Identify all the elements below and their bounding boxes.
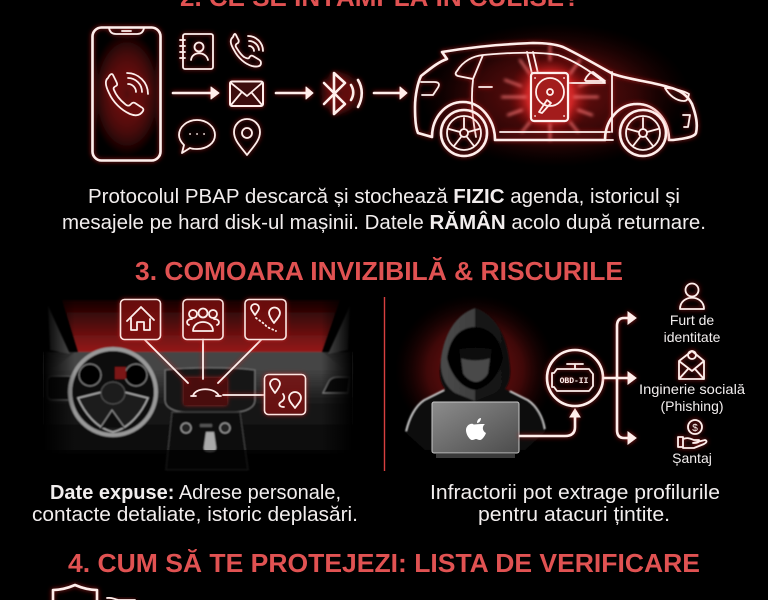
text block: criminals: Infractorii pot extrage profilurile	[430, 482, 720, 504]
dashboard scene	[44, 300, 352, 470]
icon: blackmail hand with coin	[678, 420, 707, 448]
illustration: laptop	[432, 402, 519, 458]
heading: section 3: 3. COMOARA INVIZIBILĂ & RISCURILE	[135, 256, 623, 286]
label: identity theft: identitate	[664, 329, 721, 345]
icon: wireless car	[107, 598, 135, 600]
arrow: data to bluetooth	[276, 87, 313, 99]
laptop logo	[466, 418, 486, 440]
label: blackmail: Șantaj	[672, 450, 712, 466]
icon: hard disk	[531, 73, 568, 121]
arrow: phone to data	[173, 87, 219, 99]
icon: call log	[231, 34, 263, 67]
label: social engineering: Inginerie socială	[639, 381, 745, 397]
connector lines	[145, 339, 264, 395]
text block: PBAP explanation: Protocolul PBAP descarcă și stochează FIZIC agenda, istoricul și	[88, 186, 680, 208]
text block: exposed data: Date expuse: Adrese personale,	[50, 482, 341, 504]
icon: OBD-II engine	[547, 350, 603, 406]
illustration: car with hard disk	[415, 23, 697, 167]
bottom fade	[44, 450, 352, 472]
diagram: phone to car data flow	[91, 23, 697, 167]
icon: OBD-II engine: OBD-II	[560, 377, 589, 386]
icon: person	[680, 284, 704, 309]
panel: hacker attack paths	[395, 284, 745, 466]
car outline	[415, 43, 697, 140]
label: identity theft: Furt de	[670, 312, 714, 328]
icon: envelope	[230, 82, 263, 106]
screen with phone icon	[184, 378, 227, 405]
icon box: saved locations	[264, 374, 306, 414]
text block: PBAP explanation	[62, 186, 706, 234]
label: identity theft	[664, 312, 721, 345]
panel edge fade	[44, 296, 352, 472]
branching arrows	[604, 312, 636, 444]
icon: contacts notebook	[180, 34, 213, 69]
text block: exposed data	[32, 482, 358, 526]
icon: blackmail hand with coin: $	[692, 423, 698, 434]
label: social engineering	[639, 381, 745, 414]
icon: phishing envelope	[679, 351, 704, 379]
ground line	[416, 156, 695, 158]
arrow: bluetooth to car	[374, 87, 407, 99]
divider	[384, 297, 386, 471]
text block: PBAP explanation: mesajele pe hard disk-ul mașinii. Datele RĂMÂN acolo după returnare.	[62, 210, 706, 234]
rear wheel	[441, 110, 487, 156]
icon box: home	[120, 300, 160, 340]
text block: criminals	[430, 482, 720, 526]
illustration: hooded hacker	[405, 308, 545, 450]
front wheel	[620, 110, 666, 156]
panel: car dashboard exposed data	[44, 296, 352, 472]
heading: section 4: 4. CUM SĂ TE PROTEJEZI: LISTA DE VERIFICARE	[68, 548, 700, 578]
arrow: laptop to OBD	[520, 409, 580, 436]
icon: chat bubble	[179, 120, 215, 153]
icon: map pin	[234, 119, 260, 155]
icon box: people	[183, 300, 223, 340]
icon: smartphone with call	[91, 28, 163, 160]
starburst rays	[502, 46, 598, 140]
text block: exposed data: contacte detaliate, istoric deplasări.	[32, 504, 358, 526]
text block: criminals: pentru atacuri țintite.	[478, 504, 670, 526]
icon: bluetooth signal	[318, 69, 362, 117]
label: social engineering: (Phishing)	[660, 398, 724, 414]
icon box: route history	[245, 300, 286, 340]
icon: shield	[53, 585, 97, 600]
